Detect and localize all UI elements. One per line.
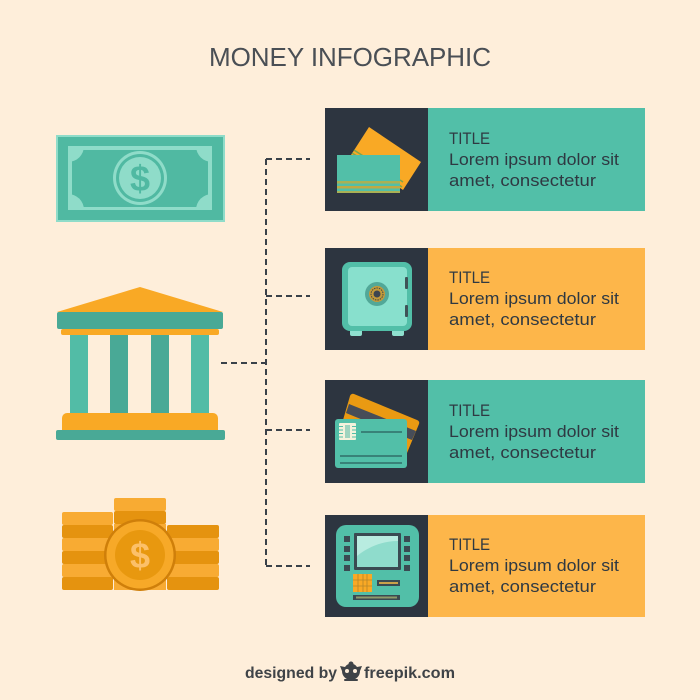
footer credit: freepik.com	[364, 665, 455, 682]
footer credit	[245, 662, 455, 682]
text: item 2: TITLE	[449, 269, 490, 287]
panel: cash	[325, 108, 645, 211]
text: item 3: amet, consectetur	[449, 444, 597, 462]
panel: safe	[325, 248, 645, 350]
text: item 3: Lorem ipsum dolor sit	[449, 423, 619, 441]
icon: credit cards	[335, 394, 419, 468]
text: item 3: TITLE	[449, 402, 490, 420]
icon: ATM machine	[336, 525, 419, 607]
icon: coin stacks	[62, 498, 219, 591]
connector lines	[221, 159, 310, 566]
text: item 4: TITLE	[449, 536, 490, 554]
panel: ATM	[325, 515, 645, 617]
text: item 4: Lorem ipsum dolor sit	[449, 557, 619, 575]
text: item 1: amet, consectetur	[449, 172, 597, 190]
title: MONEY INFOGRAPHIC	[209, 42, 491, 72]
text: item 2: Lorem ipsum dolor sit	[449, 290, 619, 308]
panel: credit cards	[325, 380, 645, 483]
icon: bank building	[56, 287, 225, 440]
text: item 1	[449, 130, 619, 190]
icon: safe box	[342, 262, 412, 336]
icon: freepik logo	[340, 662, 362, 681]
icon: dollar bill	[56, 135, 225, 222]
text: item 2: amet, consectetur	[449, 311, 597, 329]
text: item 4: amet, consectetur	[449, 578, 597, 596]
icon: coin stacks: $	[130, 535, 150, 576]
text: item 3	[449, 402, 619, 462]
text: item 1: Lorem ipsum dolor sit	[449, 151, 619, 169]
text: item 1: TITLE	[449, 130, 490, 148]
icon: stack of banknotes	[337, 127, 421, 193]
icon: dollar bill: $	[130, 158, 150, 199]
footer credit: designed by	[245, 665, 337, 682]
text: item 4	[449, 536, 619, 596]
text: item 2	[449, 269, 619, 329]
